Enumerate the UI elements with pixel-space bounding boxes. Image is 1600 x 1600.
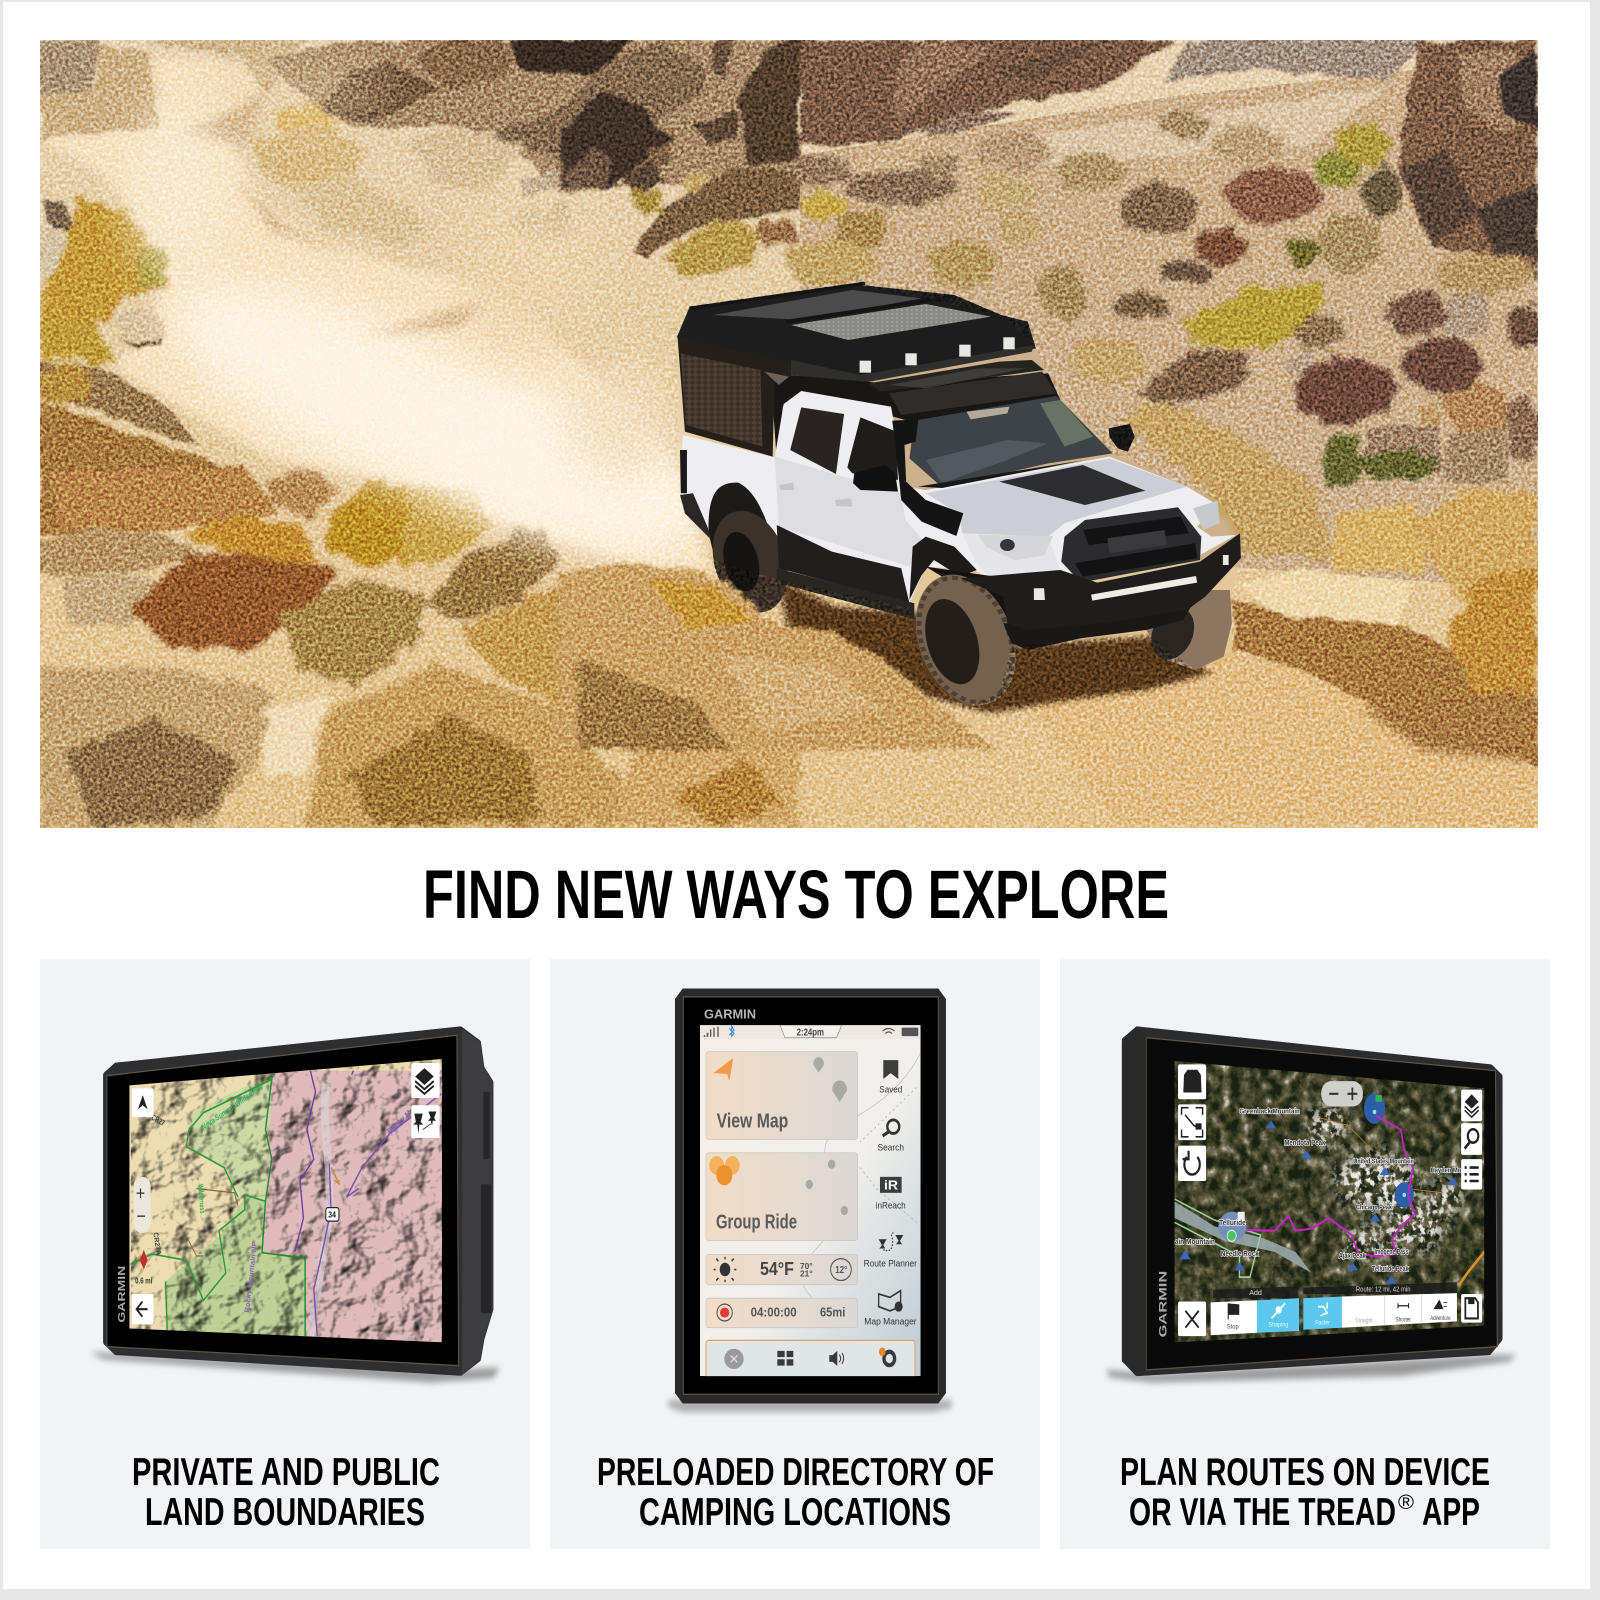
running board: [777, 568, 914, 619]
camper roof: [677, 284, 1036, 383]
caption: OR VIA THE TREAD: [1129, 1491, 1396, 1534]
mountain labels: Hayden Mo: [1431, 1167, 1461, 1175]
map labels: Wilderness: [196, 1184, 207, 1214]
satellite map: Add: [1249, 1289, 1262, 1297]
camper lights: [860, 337, 1015, 373]
mountain labels: Needle Rock: [1221, 1251, 1259, 1258]
side menu: Search: [878, 1142, 904, 1153]
map buttons: [132, 1063, 440, 1324]
boundaries and roads: [130, 1071, 441, 1336]
map buttons: −: [137, 1205, 146, 1227]
panel: camping locations: [550, 959, 1040, 1549]
map labels: CR27A: [152, 1232, 163, 1256]
mountain labels: United States Mountain: [1353, 1158, 1414, 1166]
card: weather: 21°: [800, 1269, 813, 1278]
card: weather: 70°: [800, 1261, 813, 1271]
map labels: CR27: [150, 1112, 166, 1128]
card: Group Ride: Group Ride: [716, 1210, 797, 1233]
fog lamps: [1034, 555, 1229, 600]
mountain labels: ain Mountain: [1175, 1239, 1215, 1246]
caption: [132, 1451, 440, 1534]
side menu: Route Planner: [864, 1258, 917, 1269]
far front wheel: [1145, 590, 1232, 670]
route options: Shaping: [1269, 1322, 1288, 1329]
dust glow over trail: [130, 50, 725, 587]
front bumper: [960, 533, 1241, 630]
side menu: Map Manager: [864, 1316, 917, 1327]
hero photo: truck on desert trail: [38, 39, 1542, 828]
caption: [597, 1451, 994, 1534]
map labels: Rocky M: [386, 1108, 412, 1136]
card: trip recorder: 04:00:00: [751, 1307, 797, 1320]
device: landscape navigator with satellite route: [1106, 1028, 1517, 1382]
caption: CAMPING LOCATIONS: [639, 1491, 951, 1534]
device: landscape navigator with topo map: [90, 1028, 500, 1382]
map labels: [135, 1082, 412, 1313]
map labels: Neva Summit Wilderness: [200, 1082, 264, 1132]
card: Group Ride: [706, 1153, 858, 1240]
snorkel: [892, 419, 963, 536]
device body: [675, 988, 946, 1404]
vehicle marker: [140, 1250, 148, 1270]
satellite map: [1175, 1061, 1484, 1343]
device shadow: [90, 1352, 500, 1382]
grille: [1061, 507, 1201, 583]
headlights: [978, 535, 1053, 561]
ground shadow: [779, 580, 1211, 713]
map labels: Rocky Mountain NP: [243, 1241, 259, 1313]
map screen: [129, 1058, 445, 1345]
mountain labels: Chicago Peak: [1356, 1204, 1392, 1212]
caption: ®: [1398, 1492, 1414, 1514]
card: View Map: [706, 1052, 858, 1139]
side windows: [790, 407, 844, 474]
device shadow: [668, 1400, 952, 1412]
device: portrait navigator home screen: [668, 988, 952, 1412]
side menu: inReach: [876, 1200, 906, 1211]
mountain labels: Telluride Peak: [1372, 1265, 1409, 1273]
mountain labels: Telluride: [1219, 1219, 1246, 1227]
route shield: [326, 1208, 339, 1221]
side mirror: [853, 465, 898, 492]
mountain labels: Imogene Pass: [1374, 1249, 1409, 1256]
route options: Adventure: [1430, 1316, 1451, 1322]
photo grain: [40, 40, 1538, 828]
camper to cab gap: [774, 373, 1060, 450]
route options: Stop: [1227, 1324, 1239, 1331]
card: weather: [706, 1254, 858, 1285]
caption: PRIVATE AND PUBLIC: [132, 1451, 440, 1494]
right side of landscape: [785, 39, 1542, 825]
home screen: [700, 1025, 921, 1387]
bottom toolbar: [706, 1340, 915, 1387]
side menu: [864, 1060, 917, 1327]
mountain labels: Mendota Peak: [1284, 1139, 1325, 1147]
front wheel arch: [909, 537, 977, 600]
GARMIN wordmark: GARMIN: [117, 1266, 128, 1323]
left side of landscape: [38, 39, 800, 828]
wordmark: GARMIN: [1157, 1271, 1169, 1337]
map buttons: +: [136, 1182, 145, 1204]
wordmark: GARMIN: [704, 1008, 756, 1022]
map buttons: [1178, 1064, 1482, 1336]
status bar: [704, 1026, 918, 1038]
route bar: [1213, 1282, 1457, 1298]
rear wheel: [712, 510, 788, 612]
wheel well shadow: [927, 567, 1006, 618]
satellite map: Route: 12 mi, 42 min: [1356, 1286, 1411, 1294]
device body: [106, 1029, 491, 1373]
front wheel: [916, 574, 1016, 706]
truck with camper: [677, 282, 1241, 714]
card: View Map: View Map: [717, 1109, 788, 1132]
route shield: 34: [328, 1210, 337, 1219]
title: FIND NEW WAYS TO EXPLORE: [423, 856, 1169, 933]
side menu: iR: [884, 1179, 898, 1193]
route options: Shorter: [1396, 1317, 1411, 1324]
camper side hatch: [678, 337, 791, 457]
caption: LAND BOUNDARIES: [145, 1491, 425, 1534]
card: trip recorder: 65mi: [820, 1307, 845, 1320]
panel: plan routes: [1060, 959, 1550, 1549]
undercarriage: [1003, 607, 1191, 650]
route options: Straight: [1355, 1318, 1373, 1325]
door lower cladding: [777, 525, 909, 603]
route options: Faster: [1315, 1320, 1330, 1327]
peak markers: [1179, 1120, 1458, 1283]
map labels: 0.6 mi: [135, 1276, 152, 1286]
windshield: [909, 396, 1113, 487]
status bar: 2:24pm: [797, 1027, 824, 1038]
white truck body: [680, 391, 1236, 603]
roof rack: [869, 360, 1044, 392]
rear wheel arch and dark trim: [708, 482, 767, 551]
side menu: Saved: [879, 1084, 903, 1095]
far mirror: [1109, 424, 1135, 452]
card: weather: 54°F: [760, 1258, 794, 1279]
hood wrap: [999, 465, 1145, 505]
door handles: [779, 483, 852, 507]
card: weather: 12°: [835, 1264, 848, 1275]
card: trip recorder: [706, 1298, 858, 1328]
mountain labels: [1175, 1108, 1461, 1273]
LED light bar: [1091, 576, 1197, 601]
panel: land boundaries: [40, 959, 530, 1549]
caption: APP: [1422, 1491, 1480, 1534]
route options: [1211, 1293, 1457, 1335]
route line: [1218, 1093, 1415, 1256]
mountain labels: Ajax Peak: [1339, 1253, 1366, 1260]
device shadow: [1106, 1355, 1517, 1382]
caption: PRELOADED DIRECTORY OF: [597, 1451, 994, 1494]
topo lines: [801, 1054, 920, 1311]
caption: [1120, 1451, 1490, 1534]
mountain labels: Greenback Mountain: [1239, 1108, 1300, 1116]
device body: [1124, 1029, 1500, 1373]
foreground bushes: [558, 562, 999, 750]
